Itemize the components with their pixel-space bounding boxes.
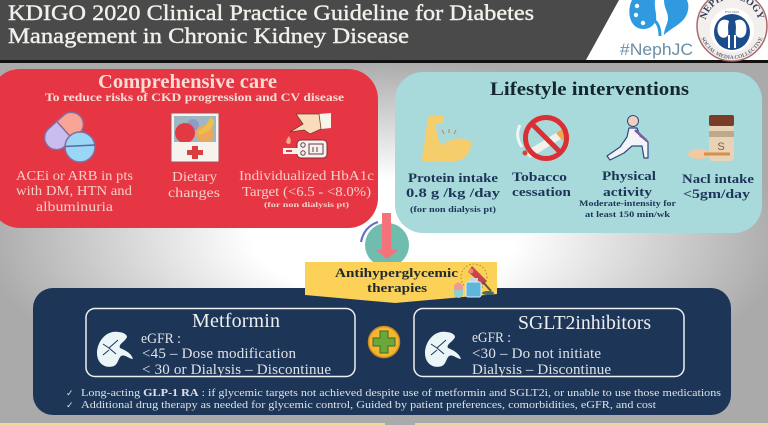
title: KDIGO 2020 Clinical Practice Guideline for Diabetes bbox=[8, 0, 534, 25]
text: protein intake bbox=[406, 170, 501, 214]
text: HbA1c target bbox=[239, 168, 374, 209]
text: ACEi or ARB: with DM, HTN and bbox=[16, 183, 132, 198]
bottom strip bbox=[0, 423, 768, 425]
text: ACEi or ARB: albuminuria bbox=[36, 199, 113, 214]
text: NaCl intake: Nacl intake bbox=[682, 171, 754, 186]
text: protein intake: Protein intake bbox=[408, 170, 498, 185]
heading: lifestyle interventions: Lifestyle interventions bbox=[490, 79, 689, 100]
text: physical activity: at least 150 min/wk bbox=[585, 210, 671, 219]
SGLT2 eGFR text bbox=[472, 330, 611, 378]
text: physical activity: activity bbox=[603, 184, 653, 199]
icon: syringe and vial bbox=[454, 264, 494, 298]
card: metformin bbox=[86, 308, 355, 378]
heading: SGLT2 inhibitors: SGLT2inhibitors bbox=[518, 312, 651, 334]
icon: dietary fridge bbox=[171, 113, 219, 162]
logo: Nephrology Social Media Collective bbox=[696, 0, 768, 62]
notes: ✓ bbox=[66, 401, 74, 411]
text: ACEi or ARB bbox=[16, 168, 133, 214]
text: dietary changes: changes bbox=[168, 185, 220, 200]
text: ACEi or ARB: ACEi or ARB in pts bbox=[16, 168, 133, 183]
text: protein intake: (for non dialysis pt) bbox=[410, 205, 496, 214]
logo: Nephrology Social Media Collective: EST 2015 bbox=[725, 10, 739, 14]
icon: no smoking bbox=[518, 118, 570, 158]
banner text: therapies bbox=[367, 280, 427, 295]
card: SGLT2 inhibitors bbox=[414, 308, 684, 378]
text: physical activity bbox=[579, 168, 677, 219]
banner text: Antihyperglycemic bbox=[335, 265, 458, 280]
text: physical activity: Moderate-intensity for bbox=[579, 199, 677, 208]
icon: kidney bbox=[97, 332, 133, 367]
icon: kidney bbox=[425, 332, 461, 367]
text: protein intake: 0.8 g /kg /day bbox=[406, 185, 501, 200]
text: dietary changes bbox=[168, 169, 220, 200]
icon: salt jar and spoon: S bbox=[717, 141, 725, 153]
text: HbA1c target: (for non dialysis pt) bbox=[264, 200, 350, 209]
title: Management in Chronic Kidney Disease bbox=[8, 23, 409, 48]
icon: stretching figure bbox=[607, 116, 648, 160]
SGLT2 eGFR text: <30 – Do not initiate bbox=[472, 346, 601, 362]
metformin eGFR text bbox=[141, 331, 331, 378]
icon: plus bbox=[368, 326, 400, 358]
header band bbox=[0, 0, 768, 63]
text: tobacco cessation: cessation bbox=[512, 184, 572, 199]
notes: Long-acting GLP-1 RA : if glycemic targets not achieved despite use of metformin and SGLT2i, or unable to use those medications bbox=[81, 387, 721, 399]
metformin eGFR text: < 30 or Dialysis – Discontinue bbox=[142, 362, 331, 378]
SGLT2 eGFR text: eGFR : bbox=[472, 330, 511, 346]
text: tobacco cessation: Tobacco bbox=[512, 169, 567, 184]
icon: pills bbox=[40, 107, 95, 162]
text: NaCl intake bbox=[682, 171, 754, 201]
text: dietary changes: Dietary bbox=[172, 169, 217, 184]
panel: drug therapy bbox=[33, 288, 731, 415]
logo: Nephrology Social Media Collective: SOCIAL MEDIA COLLECTIVE bbox=[702, 37, 763, 59]
metformin eGFR text: <45 – Dose modification bbox=[142, 346, 296, 362]
logo: NephJC bbox=[620, 0, 693, 59]
notes bbox=[66, 387, 721, 411]
panel: comprehensive care bbox=[0, 69, 378, 228]
title bbox=[8, 0, 534, 48]
icon: salt jar and spoon bbox=[688, 115, 734, 161]
metformin eGFR text: eGFR : bbox=[141, 331, 181, 347]
text: tobacco cessation bbox=[512, 169, 572, 199]
banner: antihyperglycemic therapies bbox=[305, 262, 497, 303]
subheading: To reduce risks of CKD progression and CV disease bbox=[45, 92, 344, 104]
icon: muscle arm bbox=[422, 115, 471, 162]
text: NaCl intake: <5gm/day bbox=[683, 186, 751, 201]
text: HbA1c target: Individualized HbA1c bbox=[239, 168, 374, 183]
heading: comprehensive care: Comprehensive care bbox=[98, 71, 277, 93]
text: HbA1c target: Target (<6.5 - <8.0%) bbox=[242, 184, 371, 199]
panel: lifestyle interventions bbox=[395, 72, 762, 233]
text: physical activity: Physical bbox=[602, 168, 656, 183]
connector arrow bbox=[361, 213, 409, 267]
icon: glucose test bbox=[283, 113, 331, 158]
SGLT2 eGFR text: Dialysis – Discontinue bbox=[472, 362, 611, 378]
heading: metformin: Metformin bbox=[192, 310, 280, 332]
notes: Additional drug therapy as needed for glycemic control, Guided by patient preferences, comorbidities, eGFR, and cost bbox=[81, 399, 656, 411]
banner text bbox=[335, 265, 458, 295]
logo: NephJC: #NephJC bbox=[620, 40, 693, 59]
notes: ✓ bbox=[66, 389, 74, 399]
